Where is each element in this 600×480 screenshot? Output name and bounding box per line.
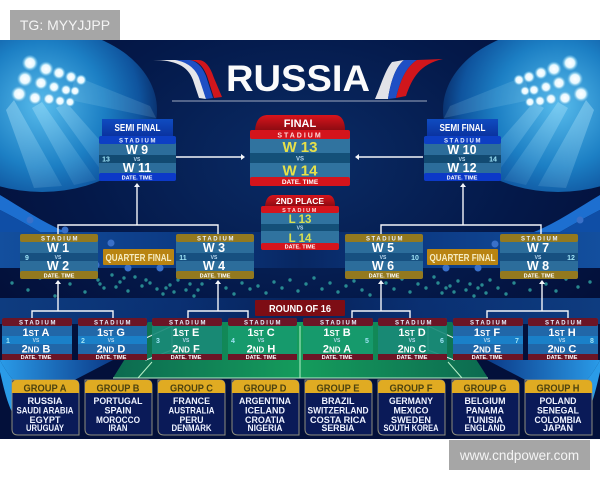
group E: COSTA RICA (310, 415, 366, 426)
quarter final card W3 W4: VS (211, 255, 218, 261)
quarter final card W5 W6: W 6 (372, 259, 394, 273)
round of 16 card 2: 2ND D (97, 344, 125, 356)
round of 16 card 6: 6 (440, 338, 444, 345)
final card: W 13 (282, 139, 318, 156)
round of 16 card 4 (228, 318, 297, 361)
round of 16 card 5: 2ND A (323, 344, 351, 356)
semi final left: VS (134, 157, 141, 163)
group F: MEXICO (394, 405, 428, 416)
round of 16 card 1: 1 (6, 338, 10, 345)
group C: PERU (180, 415, 204, 426)
group H: JAPAN (543, 423, 573, 434)
quarter final card W5 W6: STADIUM (366, 236, 404, 242)
quarter final card W7 W8: DATE. TIME (524, 274, 555, 280)
final card: FINAL (284, 118, 316, 130)
semi final right: STADIUM (444, 138, 482, 144)
third place card: VS (297, 226, 304, 232)
round of 16 card 7: STADIUM (470, 320, 508, 326)
round of 16 card 3: 3 (156, 338, 160, 345)
group G: BELGIUM (464, 396, 506, 407)
third place card: L 13 (289, 214, 311, 226)
group H: COLOMBIA (534, 415, 582, 426)
round of 16 card 4: 4 (231, 338, 235, 345)
quarter final card W1 W2: 9 (25, 255, 29, 262)
group G: GROUP G (464, 384, 507, 394)
semi final left: W 9 (126, 143, 148, 157)
quarter final card W3 W4: W 3 (203, 241, 225, 255)
round of 16 card 8: VS (559, 338, 566, 344)
round of 16 card 5: DATE. TIME (322, 355, 353, 361)
quarter final card W7 W8 (500, 234, 578, 280)
third place card (261, 195, 339, 250)
round of 16 card 2: 1ST G (97, 327, 125, 339)
group C (158, 380, 225, 435)
round of 16 card 6: VS (409, 338, 416, 344)
group B: GROUP B (96, 384, 140, 394)
round of 16 card 2 (78, 318, 147, 361)
round of 16 card 5: 1ST B (323, 327, 351, 339)
group B: MOROCCO (96, 415, 140, 426)
quarter final label right (427, 249, 498, 265)
semi final left: SEMI FINAL (114, 123, 160, 134)
group H: POLAND (540, 396, 577, 407)
group B: PORTUGAL (94, 396, 143, 407)
round of 16 card 2: DATE. TIME (96, 355, 127, 361)
title: Russia with flag swooshes: RUSSIA (226, 58, 370, 99)
quarter final card W1 W2: DATE. TIME (44, 274, 75, 280)
round of 16 card 4: DATE. TIME (246, 355, 277, 361)
quarter final label left: QUARTER FINAL (106, 253, 172, 264)
semi final left: STADIUM (119, 138, 157, 144)
left flag swoosh (153, 60, 222, 99)
quarter final card W3 W4 (176, 234, 254, 280)
round of 16 card 3: VS (183, 338, 190, 344)
website label bottom right: www.cndpower.com (459, 448, 579, 463)
quarter final card W7 W8: W 7 (527, 241, 549, 255)
round of 16 card 1: STADIUM (19, 320, 57, 326)
group F: SOUTH KOREA (384, 423, 439, 434)
semi final right: 14 (489, 156, 497, 164)
round of 16 card 5: 5 (365, 338, 369, 345)
round of 16 card 3: 2ND F (172, 344, 200, 356)
quarter final card W3 W4: STADIUM (197, 236, 235, 242)
group G: ENGLAND (464, 423, 506, 434)
round of 16 card 7: 7 (515, 338, 519, 345)
group C: DENMARK (172, 423, 212, 434)
round of 16 card 6: STADIUM (395, 320, 433, 326)
round of 16 card 4: 2ND H (247, 344, 275, 356)
round of 16 card 7: VS (484, 338, 491, 344)
round of 16 card 8: 2ND C (548, 344, 576, 356)
round of 16 card 1 (2, 318, 72, 361)
quarter final card W1 W2: W 2 (47, 259, 69, 273)
group D (232, 380, 299, 435)
group G (452, 380, 519, 435)
quarter final card W1 W2: W 1 (47, 241, 69, 255)
third place card: STADIUM (282, 208, 318, 214)
soccer field (113, 322, 488, 378)
round of 16 card 3 (152, 318, 222, 361)
tag label top left: TG: MYYJJPP (20, 17, 110, 33)
quarter final card W7 W8: VS (535, 255, 542, 261)
round of 16 card 1: 1ST A (23, 327, 50, 339)
quarter final label right: QUARTER FINAL (430, 253, 496, 264)
final card: W 14 (282, 162, 318, 180)
quarter final card W7 W8: 12 (567, 255, 575, 262)
group E: SERBIA (322, 423, 355, 434)
group F (378, 380, 445, 435)
group E: GROUP E (316, 384, 360, 394)
group H (525, 380, 592, 435)
group A: RUSSIA (28, 396, 63, 407)
round of 16 card 6: 2ND C (398, 344, 426, 356)
group E (305, 380, 372, 435)
third place card: DATE. TIME (285, 244, 316, 250)
left floodlight (0, 28, 157, 192)
round of 16 card 8: 8 (590, 338, 594, 345)
semi final left (99, 119, 176, 182)
quarter final card W5 W6: VS (380, 255, 387, 261)
round of 16 card 2: STADIUM (94, 320, 132, 326)
round of 16 card 7: 1ST F (474, 327, 500, 339)
final card: VS (296, 156, 304, 162)
group D: ARGENTINA (239, 396, 291, 407)
third place card: L 14 (289, 233, 312, 245)
quarter final card W5 W6: DATE. TIME (369, 274, 400, 280)
round of 16 card 4: STADIUM (244, 320, 282, 326)
round of 16 card 3: 1ST E (173, 327, 199, 339)
group D: ICELAND (245, 405, 285, 416)
group A: EGYPT (30, 415, 61, 426)
round of 16 card 1: VS (33, 338, 40, 344)
quarter final card W3 W4: 11 (179, 255, 187, 262)
tag label top left (10, 10, 120, 40)
group E: SWITZERLAND (308, 405, 369, 416)
round of 16 card 6: DATE. TIME (397, 355, 428, 361)
right flag swoosh (375, 59, 443, 99)
round of 16 card 8: 1ST H (548, 327, 576, 339)
round of 16 card 8: DATE. TIME (547, 355, 578, 361)
quarter final card W5 W6 (345, 234, 423, 280)
round of 16 card 2: 2 (81, 338, 85, 345)
final card: DATE. TIME (282, 179, 319, 186)
group D: NIGERIA (248, 423, 283, 434)
quarter final card W5 W6: 10 (411, 255, 419, 262)
round of 16 label: ROUND OF 16 (269, 304, 331, 315)
semi final right: VS (459, 157, 466, 163)
website label bottom right (449, 440, 590, 470)
group H: SENEGAL (537, 405, 579, 416)
round of 16 card 8: STADIUM (545, 320, 583, 326)
group A: GROUP A (24, 384, 66, 394)
group B: IRAN (108, 423, 128, 434)
group B (85, 380, 152, 435)
group C: GROUP C (170, 384, 213, 394)
group F: GERMANY (389, 396, 434, 407)
quarter final card W5 W6: W 5 (372, 241, 394, 255)
round of 16 card 3: DATE. TIME (171, 355, 202, 361)
round of 16 card 7: DATE. TIME (472, 355, 503, 361)
group H: GROUP H (536, 384, 580, 394)
quarter final card W1 W2: VS (55, 255, 62, 261)
final card: STADIUM (277, 132, 323, 140)
group D: GROUP D (244, 384, 286, 394)
final card (250, 115, 350, 186)
semi final left: W 11 (123, 161, 151, 175)
semi final right: W 10 (447, 143, 477, 157)
round of 16 card 1: 2ND B (22, 344, 50, 356)
round of 16 card 8 (528, 318, 598, 361)
round of 16 card 7 (453, 318, 523, 361)
round of 16 card 5 (303, 318, 373, 361)
round of 16 card 4: 1ST C (247, 327, 275, 339)
semi final left: 13 (102, 156, 110, 164)
quarter final label left (103, 249, 174, 265)
group C: AUSTRALIA (168, 405, 215, 416)
round of 16 card 5: VS (334, 338, 341, 344)
group D: CROATIA (245, 415, 285, 426)
third place card: 2ND PLACE (276, 196, 324, 206)
round of 16 card 7: 2ND E (473, 344, 501, 356)
semi final right: SEMI FINAL (440, 123, 486, 134)
round of 16 card 4: VS (258, 338, 265, 344)
quarter final card W7 W8: STADIUM (521, 236, 559, 242)
semi final left: DATE. TIME (122, 176, 153, 182)
title: Russia with flag swooshes (153, 58, 443, 102)
group G: PANAMA (466, 405, 504, 416)
quarter final card W3 W4: DATE. TIME (200, 274, 231, 280)
group B: SPAIN (104, 405, 132, 416)
round of 16 card 1: DATE. TIME (21, 355, 52, 361)
quarter final card W1 W2: STADIUM (41, 236, 79, 242)
connector arrows (32, 154, 568, 318)
group E: BRAZIL (322, 396, 355, 407)
quarter final card W3 W4: W 4 (203, 259, 225, 273)
round of 16 card 3: STADIUM (169, 320, 207, 326)
group G: TUNISIA (467, 415, 503, 426)
group A (12, 380, 79, 435)
round of 16 card 6 (378, 318, 447, 361)
round of 16 card 2: VS (108, 338, 115, 344)
group C: FRANCE (173, 396, 210, 407)
quarter final card W7 W8: W 8 (527, 259, 549, 273)
group F: GROUP F (390, 384, 432, 394)
round of 16 label (255, 300, 345, 316)
semi final right (424, 119, 501, 182)
quarter final card W1 W2 (20, 234, 98, 280)
group A: SAUDI ARABIA (16, 405, 74, 416)
group A: URUGUAY (26, 423, 65, 434)
crowd dots (12, 275, 590, 296)
semi final right: W 12 (447, 161, 477, 175)
semi final right: DATE. TIME (447, 176, 478, 182)
right floodlight (443, 28, 600, 192)
group F: SWEDEN (391, 415, 431, 426)
round of 16 card 5: STADIUM (320, 320, 358, 326)
round of 16 card 6: 1ST D (398, 327, 426, 339)
